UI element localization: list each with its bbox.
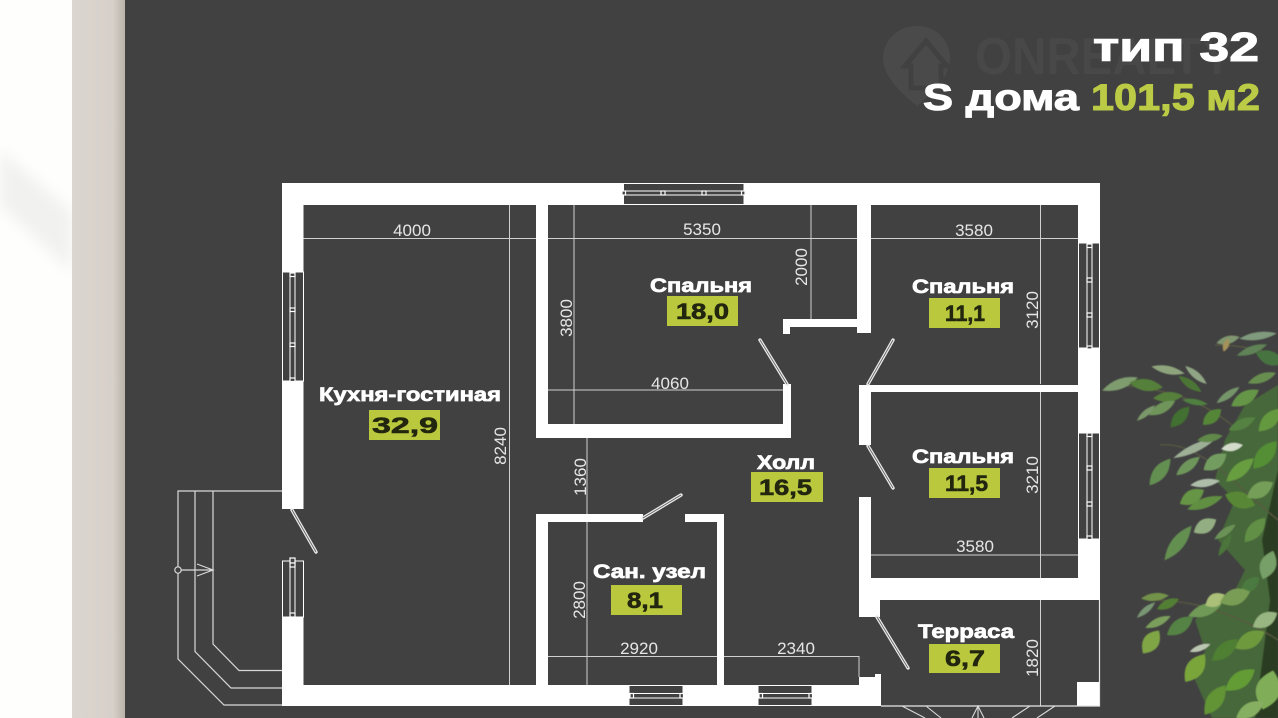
room: kitchen-living (319, 385, 501, 440)
plant (1100, 329, 1278, 718)
window: left upper (282, 272, 304, 382)
title: house area: S дома (923, 77, 1079, 118)
dimension lines (303, 205, 1078, 706)
room: hall: 16,5 (759, 475, 812, 500)
room: terrace: 6,7 (945, 646, 985, 671)
window: right upper (1078, 243, 1100, 349)
room: bathroom: Сан. узел (593, 562, 706, 583)
window: bottom bathroom (629, 686, 684, 706)
dimension labels: 1360 (571, 458, 590, 496)
doors (292, 340, 908, 668)
dimension labels: 5350 (683, 220, 721, 239)
dimension labels: 2340 (777, 639, 815, 658)
room: bathroom (593, 562, 706, 615)
window: right lower (1078, 433, 1100, 540)
background: beige wall strip (72, 0, 125, 718)
watermark logo (883, 26, 1233, 106)
terrace steps below (902, 706, 1055, 718)
room: bedroom 18: 18,0 (676, 299, 729, 324)
floor plan walls (282, 183, 1100, 706)
dimension labels: 3580 (956, 537, 994, 556)
room: kitchen-living: 32,9 (372, 413, 438, 438)
room: bedroom 11.5: Спальня (912, 447, 1014, 468)
dimension labels: 2000 (792, 248, 811, 286)
room: bedroom 11.1: Спальня (912, 277, 1014, 298)
terrace outline (881, 600, 1100, 706)
room: terrace: Терраса (918, 622, 1015, 643)
entrance steps (175, 491, 282, 705)
window: top (622, 184, 745, 204)
room: hall (751, 453, 823, 502)
door leaf highlights (292, 340, 908, 668)
room: bedroom 18 (650, 276, 752, 326)
room: bathroom: 8,1 (627, 588, 663, 613)
room: bedroom 11.1: 11,1 (945, 301, 985, 326)
dimension labels: 3800 (557, 299, 576, 337)
room: bedroom 11.5: 11,5 (945, 471, 988, 496)
background: white wall with shadow (0, 0, 72, 718)
room: kitchen-living: Кухня-гостиная (319, 385, 501, 406)
window: left lower (282, 558, 304, 617)
room: terrace (918, 622, 1015, 673)
dimension labels: 8240 (491, 427, 510, 465)
room: bedroom 11.5 (912, 447, 1014, 498)
dimension labels: 4000 (393, 221, 431, 240)
dimension labels: 2800 (570, 581, 589, 619)
room: bedroom 11.1 (912, 277, 1014, 328)
window: bottom hall (758, 686, 812, 706)
room: hall: Холл (757, 453, 815, 474)
dimension labels: 3210 (1023, 456, 1042, 494)
dimension labels: 3580 (955, 221, 993, 240)
dimension labels: 1820 (1023, 639, 1042, 677)
room: bedroom 18: Спальня (650, 276, 752, 297)
dimension labels: 3120 (1023, 291, 1042, 329)
dimension labels (393, 220, 1042, 677)
title: type: тип 32 (1093, 24, 1259, 70)
dimension labels: 4060 (651, 374, 689, 393)
title: area value: 101,5 м2 (1091, 77, 1260, 118)
dimension labels: 2920 (620, 639, 658, 658)
watermark logo: ONREALTY (975, 28, 1233, 86)
